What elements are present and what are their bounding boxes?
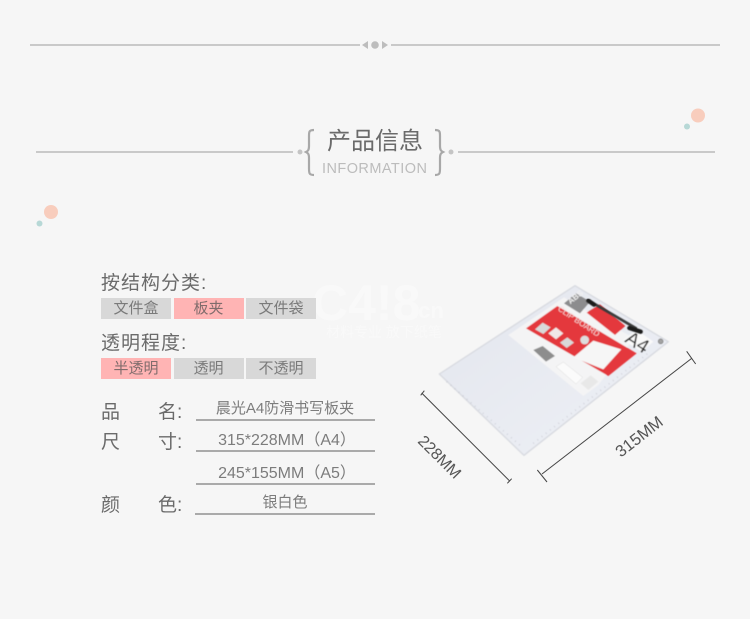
- faint watermark: 材料专业 放下纸笔: [326, 324, 442, 340]
- dimension label: 228MM: 228MM: [414, 433, 464, 483]
- spec: colour: 色:: [158, 495, 182, 516]
- faint watermark: .cn: [412, 298, 444, 323]
- product label: ABS: [566, 288, 585, 306]
- spec: colour: [101, 494, 375, 516]
- tags: structure options: 文件盒: [113, 300, 158, 317]
- spec: product name: [101, 400, 375, 423]
- product label: CLIP BOARD: [556, 304, 601, 339]
- clipboard body: [439, 286, 668, 455]
- spec: product name: 晨光A4防滑书写板夹: [216, 400, 354, 417]
- heading: transparency: 透明程度:: [101, 333, 187, 354]
- spec: product name: 名:: [158, 402, 182, 423]
- spec: colour: 颜: [101, 495, 120, 516]
- decorative dots right: [684, 108, 705, 130]
- tags: structure options: 板夹: [193, 300, 224, 317]
- tags: structure options: 文件袋: [258, 300, 304, 317]
- faint watermark: [312, 278, 447, 340]
- spec: colour: 银白色: [262, 494, 308, 511]
- decorative dots left: [36, 205, 58, 226]
- product photo: clipboard with dimensions: [420, 285, 696, 484]
- spec: size: 尺: [101, 432, 120, 453]
- heading: structure classification: 按结构分类:: [101, 273, 207, 294]
- tags: transparency options: 透明: [193, 360, 224, 377]
- spec: size: 315*228MM（A4）: [218, 432, 356, 449]
- tags: transparency options: 不透明: [258, 360, 304, 377]
- spec: size: 245*155MM（A5）: [218, 465, 356, 482]
- dimension label: 315MM: 315MM: [612, 413, 667, 461]
- tags: transparency options: 半透明: [113, 360, 158, 377]
- product label: A4: [621, 328, 653, 358]
- spec: size: 寸:: [158, 432, 182, 453]
- section heading: product information: [36, 128, 715, 177]
- faint watermark: C4!8: [312, 275, 420, 331]
- metal clip: [588, 301, 663, 344]
- tags: transparency options: [101, 358, 316, 379]
- dimension line: length: [537, 351, 696, 482]
- section heading: product information: INFORMATION: [322, 161, 427, 177]
- product label: [508, 288, 653, 396]
- spec: product name: 品: [101, 402, 120, 423]
- tags: structure options: [101, 298, 316, 319]
- top divider: [30, 41, 720, 49]
- spec: size: [101, 431, 375, 485]
- dimension line: width: [421, 391, 512, 483]
- section heading: product information: 产品信息: [327, 128, 423, 155]
